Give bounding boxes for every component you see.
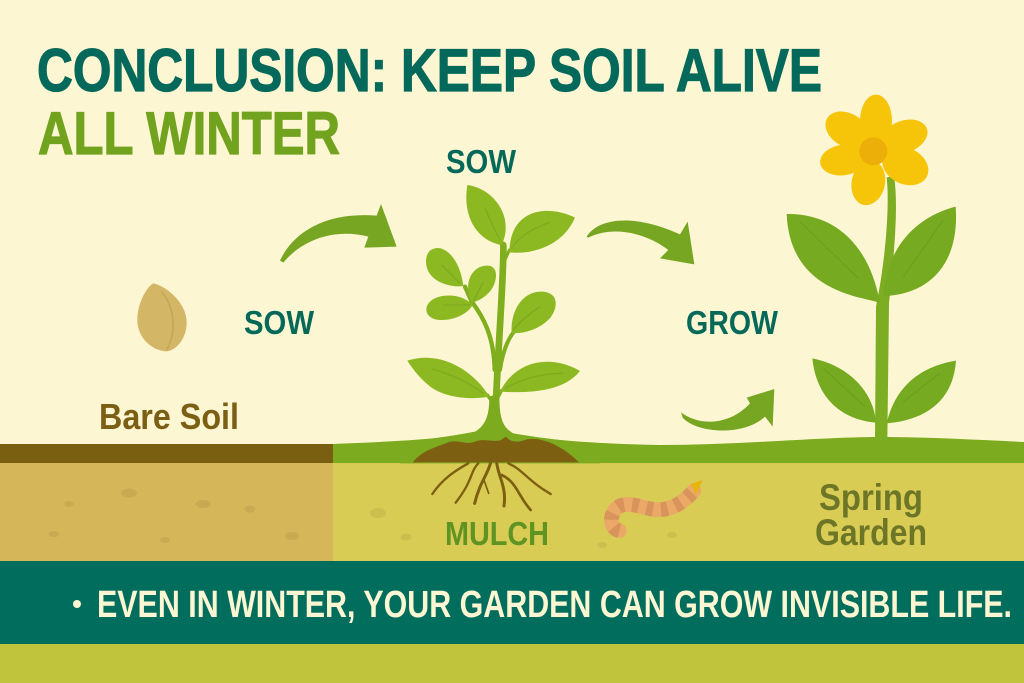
arrow: grow to flower bbox=[681, 389, 774, 431]
plant leaves bbox=[407, 185, 580, 398]
flower centre bbox=[859, 137, 887, 165]
arrow: seed to plant bbox=[280, 204, 397, 263]
banner bbox=[0, 561, 1024, 644]
flower bbox=[787, 95, 956, 440]
arrow: plant to grow bbox=[587, 220, 694, 264]
label: spring garden: Garden bbox=[815, 512, 927, 553]
plant leaf veins bbox=[432, 208, 563, 393]
green ground bbox=[333, 432, 1024, 463]
flower petals bbox=[818, 95, 935, 208]
label: mulch: MULCH bbox=[445, 515, 549, 552]
title: CONCLUSION: KEEP SOIL ALIVE bbox=[37, 37, 822, 104]
plant roots bbox=[432, 463, 551, 510]
flower leaves bbox=[787, 207, 956, 423]
flower leaf veins bbox=[800, 220, 943, 407]
flower stem bbox=[875, 176, 896, 440]
label: sow top: SOW bbox=[446, 143, 517, 180]
soil panel: bare soil bbox=[0, 444, 333, 561]
label: sow left: SOW bbox=[244, 304, 315, 341]
plant stems bbox=[465, 245, 514, 403]
bottom strip bbox=[0, 644, 1024, 683]
plant bbox=[400, 185, 600, 510]
title: ALL WINTER bbox=[38, 100, 340, 167]
plant soil mound bbox=[413, 437, 579, 462]
soil panel: mulched soil bbox=[333, 463, 1024, 561]
label: spring garden bbox=[815, 477, 927, 553]
title bbox=[37, 37, 822, 167]
icon: seed bbox=[137, 283, 187, 351]
worm tip bbox=[691, 480, 703, 495]
plant trunk and mound bbox=[400, 393, 600, 463]
label: bare soil: Bare Soil bbox=[99, 396, 239, 437]
icon: worm bbox=[611, 480, 703, 531]
label: spring garden: Spring bbox=[819, 477, 923, 518]
label: grow: GROW bbox=[686, 304, 779, 341]
